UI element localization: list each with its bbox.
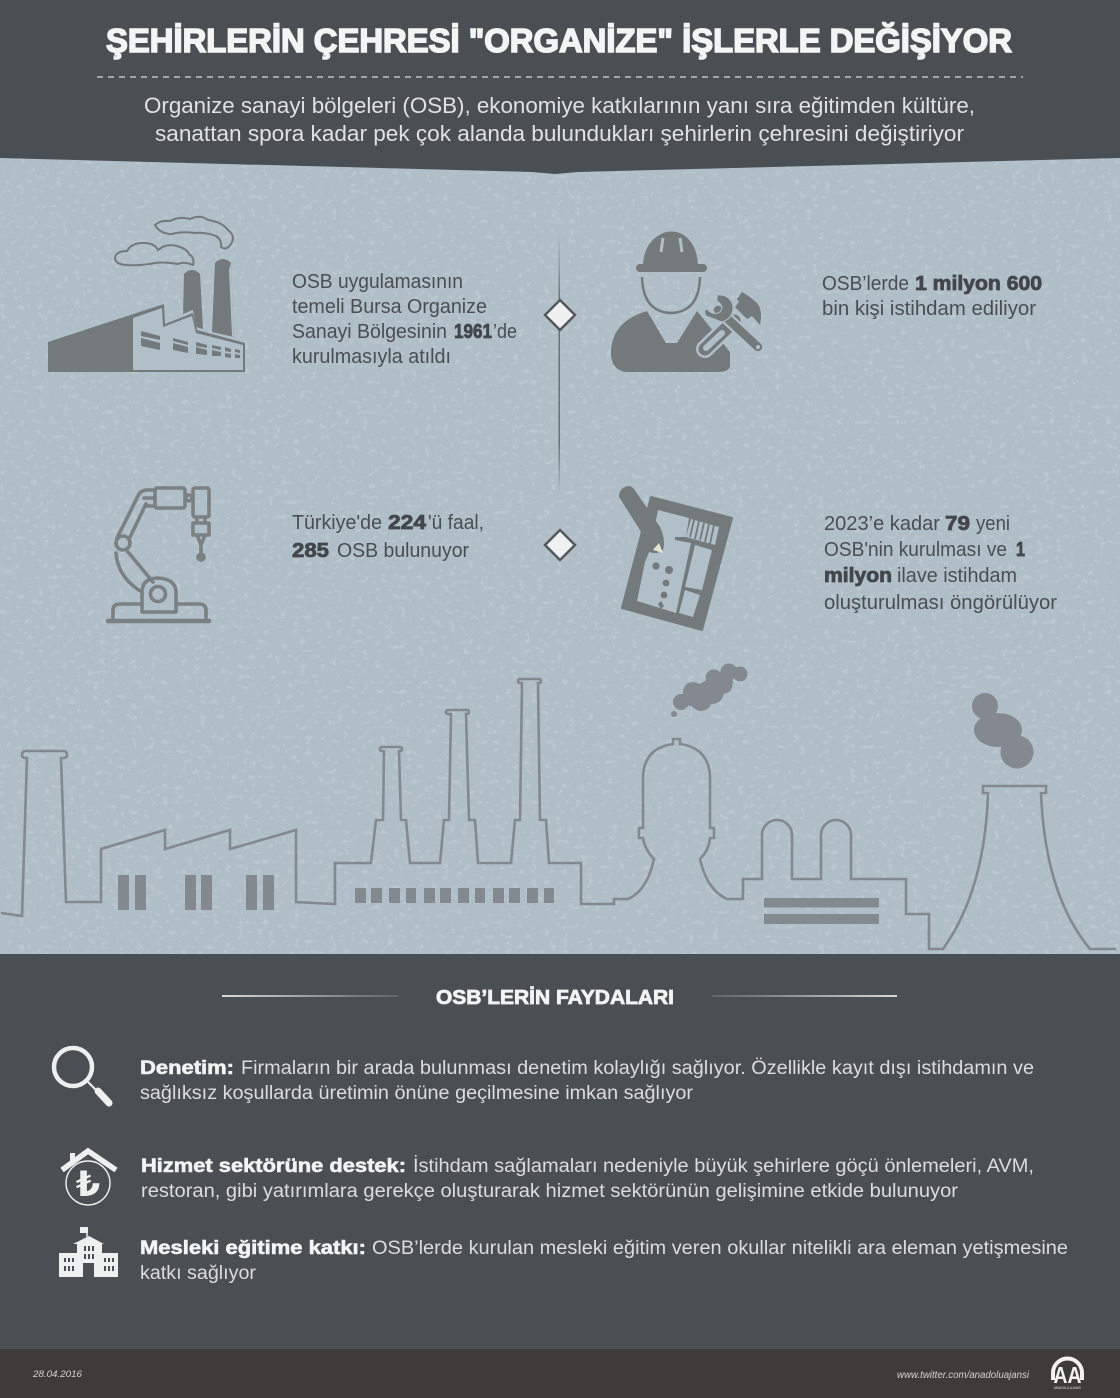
benefit: service sector bbox=[141, 1156, 1034, 1202]
benefit: service sector: restoran, gibi yatırımlara gerekçe oluşturarak hizmet sektörünün gelişimine etkide bulunuyor bbox=[141, 1181, 959, 1202]
benefits heading: OSB’LERİN FAYDALARI bbox=[436, 986, 674, 1009]
text: OSB count: 'ü faal, bbox=[428, 512, 484, 534]
panel: benefits bbox=[0, 954, 1120, 1350]
benefit: vocational training bbox=[140, 1238, 1068, 1284]
text: Bursa OSB 1961: Sanayi Bölgesinin bbox=[292, 321, 447, 343]
center divider line bbox=[558, 235, 560, 495]
text: 2023 forecast: 1 bbox=[1016, 539, 1025, 561]
benefit: vocational training: Mesleki eğitime katkı: bbox=[140, 1238, 366, 1259]
icon: city plan with pencil bbox=[619, 486, 732, 630]
benefit: vocational training: OSB’lerde kurulan mesleki eğitim veren okullar nitelikli ara eleman yetişmesine bbox=[372, 1238, 1068, 1259]
text: 2023 forecast bbox=[824, 513, 1057, 614]
text: OSB count: OSB bulunuyor bbox=[337, 540, 469, 562]
text: employment: 1 milyon 600 bbox=[915, 273, 1042, 295]
icon: robot arm bbox=[108, 488, 209, 621]
title: ŞEHİRLERİN ÇEHRESİ "ORGANİZE" İŞLERLE DEĞİŞİYOR bbox=[106, 22, 1012, 60]
icon: school bbox=[59, 1227, 118, 1277]
date: 28.04.2016 bbox=[32, 1369, 83, 1380]
text: Bursa OSB 1961: 1961 bbox=[454, 321, 492, 343]
icon: house with lira: ₺ bbox=[76, 1165, 100, 1205]
logo: Anadolu Agency: ANADOLU AJANSI bbox=[1054, 1386, 1081, 1390]
benefit: inspection bbox=[140, 1058, 1034, 1104]
text: Bursa OSB 1961: OSB uygulamasının bbox=[292, 271, 463, 293]
text: OSB count bbox=[292, 512, 484, 562]
text: Bursa OSB 1961: kurulmasıyla atıldı bbox=[292, 346, 451, 368]
text: 2023 forecast: ilave istihdam bbox=[897, 565, 1017, 587]
benefit: service sector: İstihdam sağlamaları nedeniyle büyük şehirlere göçü önlemeleri, AVM, bbox=[413, 1156, 1034, 1177]
panel: header bbox=[0, 0, 1120, 174]
text: OSB count: Türkiye'de bbox=[292, 512, 382, 534]
smoke: left cloud bbox=[671, 664, 748, 717]
text: employment: OSB’lerde bbox=[822, 273, 909, 295]
benefit: inspection: Denetim: bbox=[140, 1058, 234, 1079]
benefit: service sector: Hizmet sektörüne destek: bbox=[141, 1156, 406, 1177]
text: 2023 forecast: milyon bbox=[824, 565, 892, 587]
text: Bursa OSB 1961: temeli Bursa Organize bbox=[292, 296, 487, 318]
text: employment bbox=[822, 273, 1042, 320]
subtitle bbox=[144, 93, 975, 146]
icon: diamond top bbox=[545, 300, 575, 330]
benefit: vocational training: katkı sağlıyor bbox=[140, 1263, 257, 1284]
benefit: inspection: Firmaların bir arada bulunması denetim kolaylığı sağlıyor. Özellikle kayıt dışı istihdamın ve bbox=[241, 1058, 1034, 1079]
icon: diamond bottom bbox=[545, 530, 575, 560]
text: 2023 forecast: 2023’e kadar bbox=[824, 513, 940, 535]
text: 2023 forecast: yeni bbox=[976, 513, 1010, 535]
subtitle: Organize sanayi bölgeleri (OSB), ekonomiye katkılarının yanı sıra eğitimden kültüre, bbox=[144, 93, 975, 118]
icon: worker with tools bbox=[611, 232, 761, 372]
subtitle: sanattan spora kadar pek çok alanda bulundukları şehirlerin çehresini değiştiriyor bbox=[155, 121, 964, 146]
text: OSB count: 224 bbox=[388, 512, 427, 534]
text: OSB count: 285 bbox=[292, 540, 329, 562]
panel: footer bbox=[0, 1349, 1120, 1398]
smoke: right cloud bbox=[972, 693, 1034, 768]
twitter url: www.twitter.com/anadoluajansi bbox=[897, 1370, 1030, 1381]
text: 2023 forecast: OSB'nin kurulması ve bbox=[824, 539, 1007, 561]
logo: Anadolu Agency: AA bbox=[1054, 1362, 1082, 1388]
icon: factory bbox=[48, 217, 245, 372]
skyline windows bbox=[118, 875, 879, 924]
text: 2023 forecast: oluşturulması öngörülüyor bbox=[824, 592, 1057, 614]
icon: magnifier bbox=[54, 1048, 109, 1103]
text: Bursa OSB 1961 bbox=[292, 271, 517, 368]
text: Bursa OSB 1961: ’de bbox=[493, 321, 517, 343]
text: 2023 forecast: 79 bbox=[945, 513, 970, 535]
benefit: inspection: sağlıksız koşullarda üretimin önüne geçilmesine imkan sağlıyor bbox=[140, 1083, 694, 1104]
icon: house with lira bbox=[62, 1151, 116, 1205]
panel: textured background bbox=[0, 150, 1120, 960]
illustration: industrial skyline bbox=[1, 664, 1116, 949]
text: employment: bin kişi istihdam ediliyor bbox=[822, 298, 1036, 320]
